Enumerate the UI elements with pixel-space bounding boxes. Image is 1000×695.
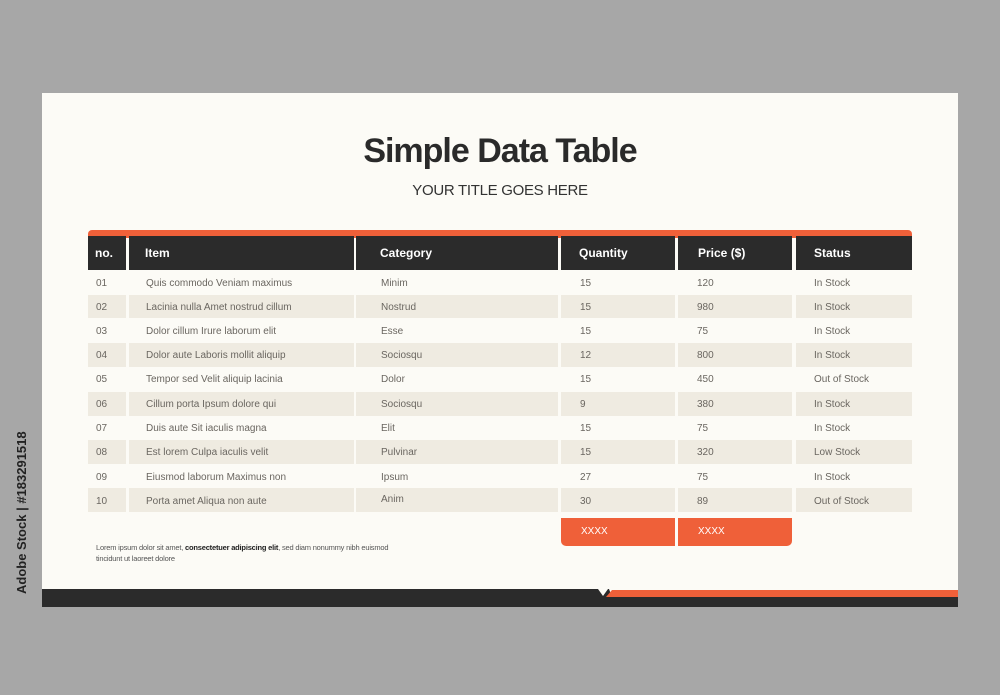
table body: 120 (697, 278, 714, 289)
totals boxes: XXXX (698, 526, 725, 537)
table body: In Stock (814, 326, 851, 337)
footnote: Lorem ipsum dolor sit amet, consectetuer adipiscing elit, sed diam nonummy nibh euismod tincidunt ut laoreet dolore (96, 543, 388, 563)
table: Category (380, 246, 432, 260)
table body: Dolor aute Laboris mollit aliquip (146, 350, 286, 361)
title: Simple Data Table (363, 132, 637, 170)
table body: 15 (580, 447, 592, 458)
table body: Dolor cillum Irure laborum elit (146, 326, 276, 337)
table body: Out of Stock (814, 496, 870, 507)
table: Status (814, 246, 851, 260)
table body: 320 (697, 447, 714, 458)
table body: Elit (381, 423, 395, 434)
table body: Est lorem Culpa iaculis velit (146, 447, 268, 458)
table: Item (145, 246, 170, 260)
table body: 75 (697, 326, 709, 337)
table body: 27 (580, 472, 592, 483)
table body: Duis aute Sit iaculis magna (146, 423, 267, 434)
table body: In Stock (814, 423, 851, 434)
table body: 15 (580, 278, 592, 289)
table body: 12 (580, 350, 592, 361)
table body: 15 (580, 326, 592, 337)
table body: 9 (580, 399, 586, 410)
table body: In Stock (814, 472, 851, 483)
table: Price ($) (698, 246, 745, 260)
table body: 30 (580, 496, 592, 507)
table body: In Stock (814, 399, 851, 410)
table body: 09 (96, 472, 108, 483)
table body: Eiusmod laborum Maximus non (146, 472, 286, 483)
table body: Low Stock (814, 447, 861, 458)
table body: Ipsum (381, 472, 408, 483)
orange top bar (88, 230, 912, 238)
table body: Quis commodo Veniam maximus (146, 278, 292, 289)
table body: 450 (697, 374, 714, 385)
table body: 02 (96, 302, 108, 313)
table body: Anim (381, 494, 404, 505)
table body: Out of Stock (814, 374, 870, 385)
table: Quantity (579, 246, 628, 260)
table body: Dolor (381, 374, 406, 385)
table body: 75 (697, 472, 709, 483)
table body: 04 (96, 350, 108, 361)
totals boxes (561, 518, 792, 546)
table body: In Stock (814, 350, 851, 361)
table body: 380 (697, 399, 714, 410)
table body: Lacinia nulla Amet nostrud cillum (146, 302, 292, 313)
table body: Esse (381, 326, 404, 337)
table body: 10 (96, 496, 108, 507)
table body: 06 (96, 399, 108, 410)
table body: 800 (697, 350, 714, 361)
table body: 08 (96, 447, 108, 458)
card (42, 93, 958, 607)
table body: 03 (96, 326, 108, 337)
table body: 01 (96, 278, 108, 289)
table body: 15 (580, 423, 592, 434)
totals boxes: XXXX (581, 526, 608, 537)
table body: 05 (96, 374, 108, 385)
table body: 15 (580, 374, 592, 385)
table body: Sociosqu (381, 399, 422, 410)
table body: 75 (697, 423, 709, 434)
table body: 07 (96, 423, 108, 434)
table body: 15 (580, 302, 592, 313)
subtitle: YOUR TITLE GOES HERE (412, 182, 588, 199)
table body: 89 (697, 496, 709, 507)
watermark side text: Adobe Stock | #183291518 (14, 431, 29, 594)
table body: 980 (697, 302, 714, 313)
bottom bar (42, 589, 958, 607)
table body: Sociosqu (381, 350, 422, 361)
table: no. (95, 246, 113, 260)
header row (88, 236, 912, 270)
table body: Pulvinar (381, 447, 418, 458)
table body: In Stock (814, 302, 851, 313)
table body: Tempor sed Velit aliquip lacinia (146, 374, 283, 385)
table body: Porta amet Aliqua non aute (146, 496, 267, 507)
table body: Nostrud (381, 302, 416, 313)
table body: Cillum porta Ipsum dolore qui (146, 399, 276, 410)
table body: Minim (381, 278, 408, 289)
table body: In Stock (814, 278, 851, 289)
